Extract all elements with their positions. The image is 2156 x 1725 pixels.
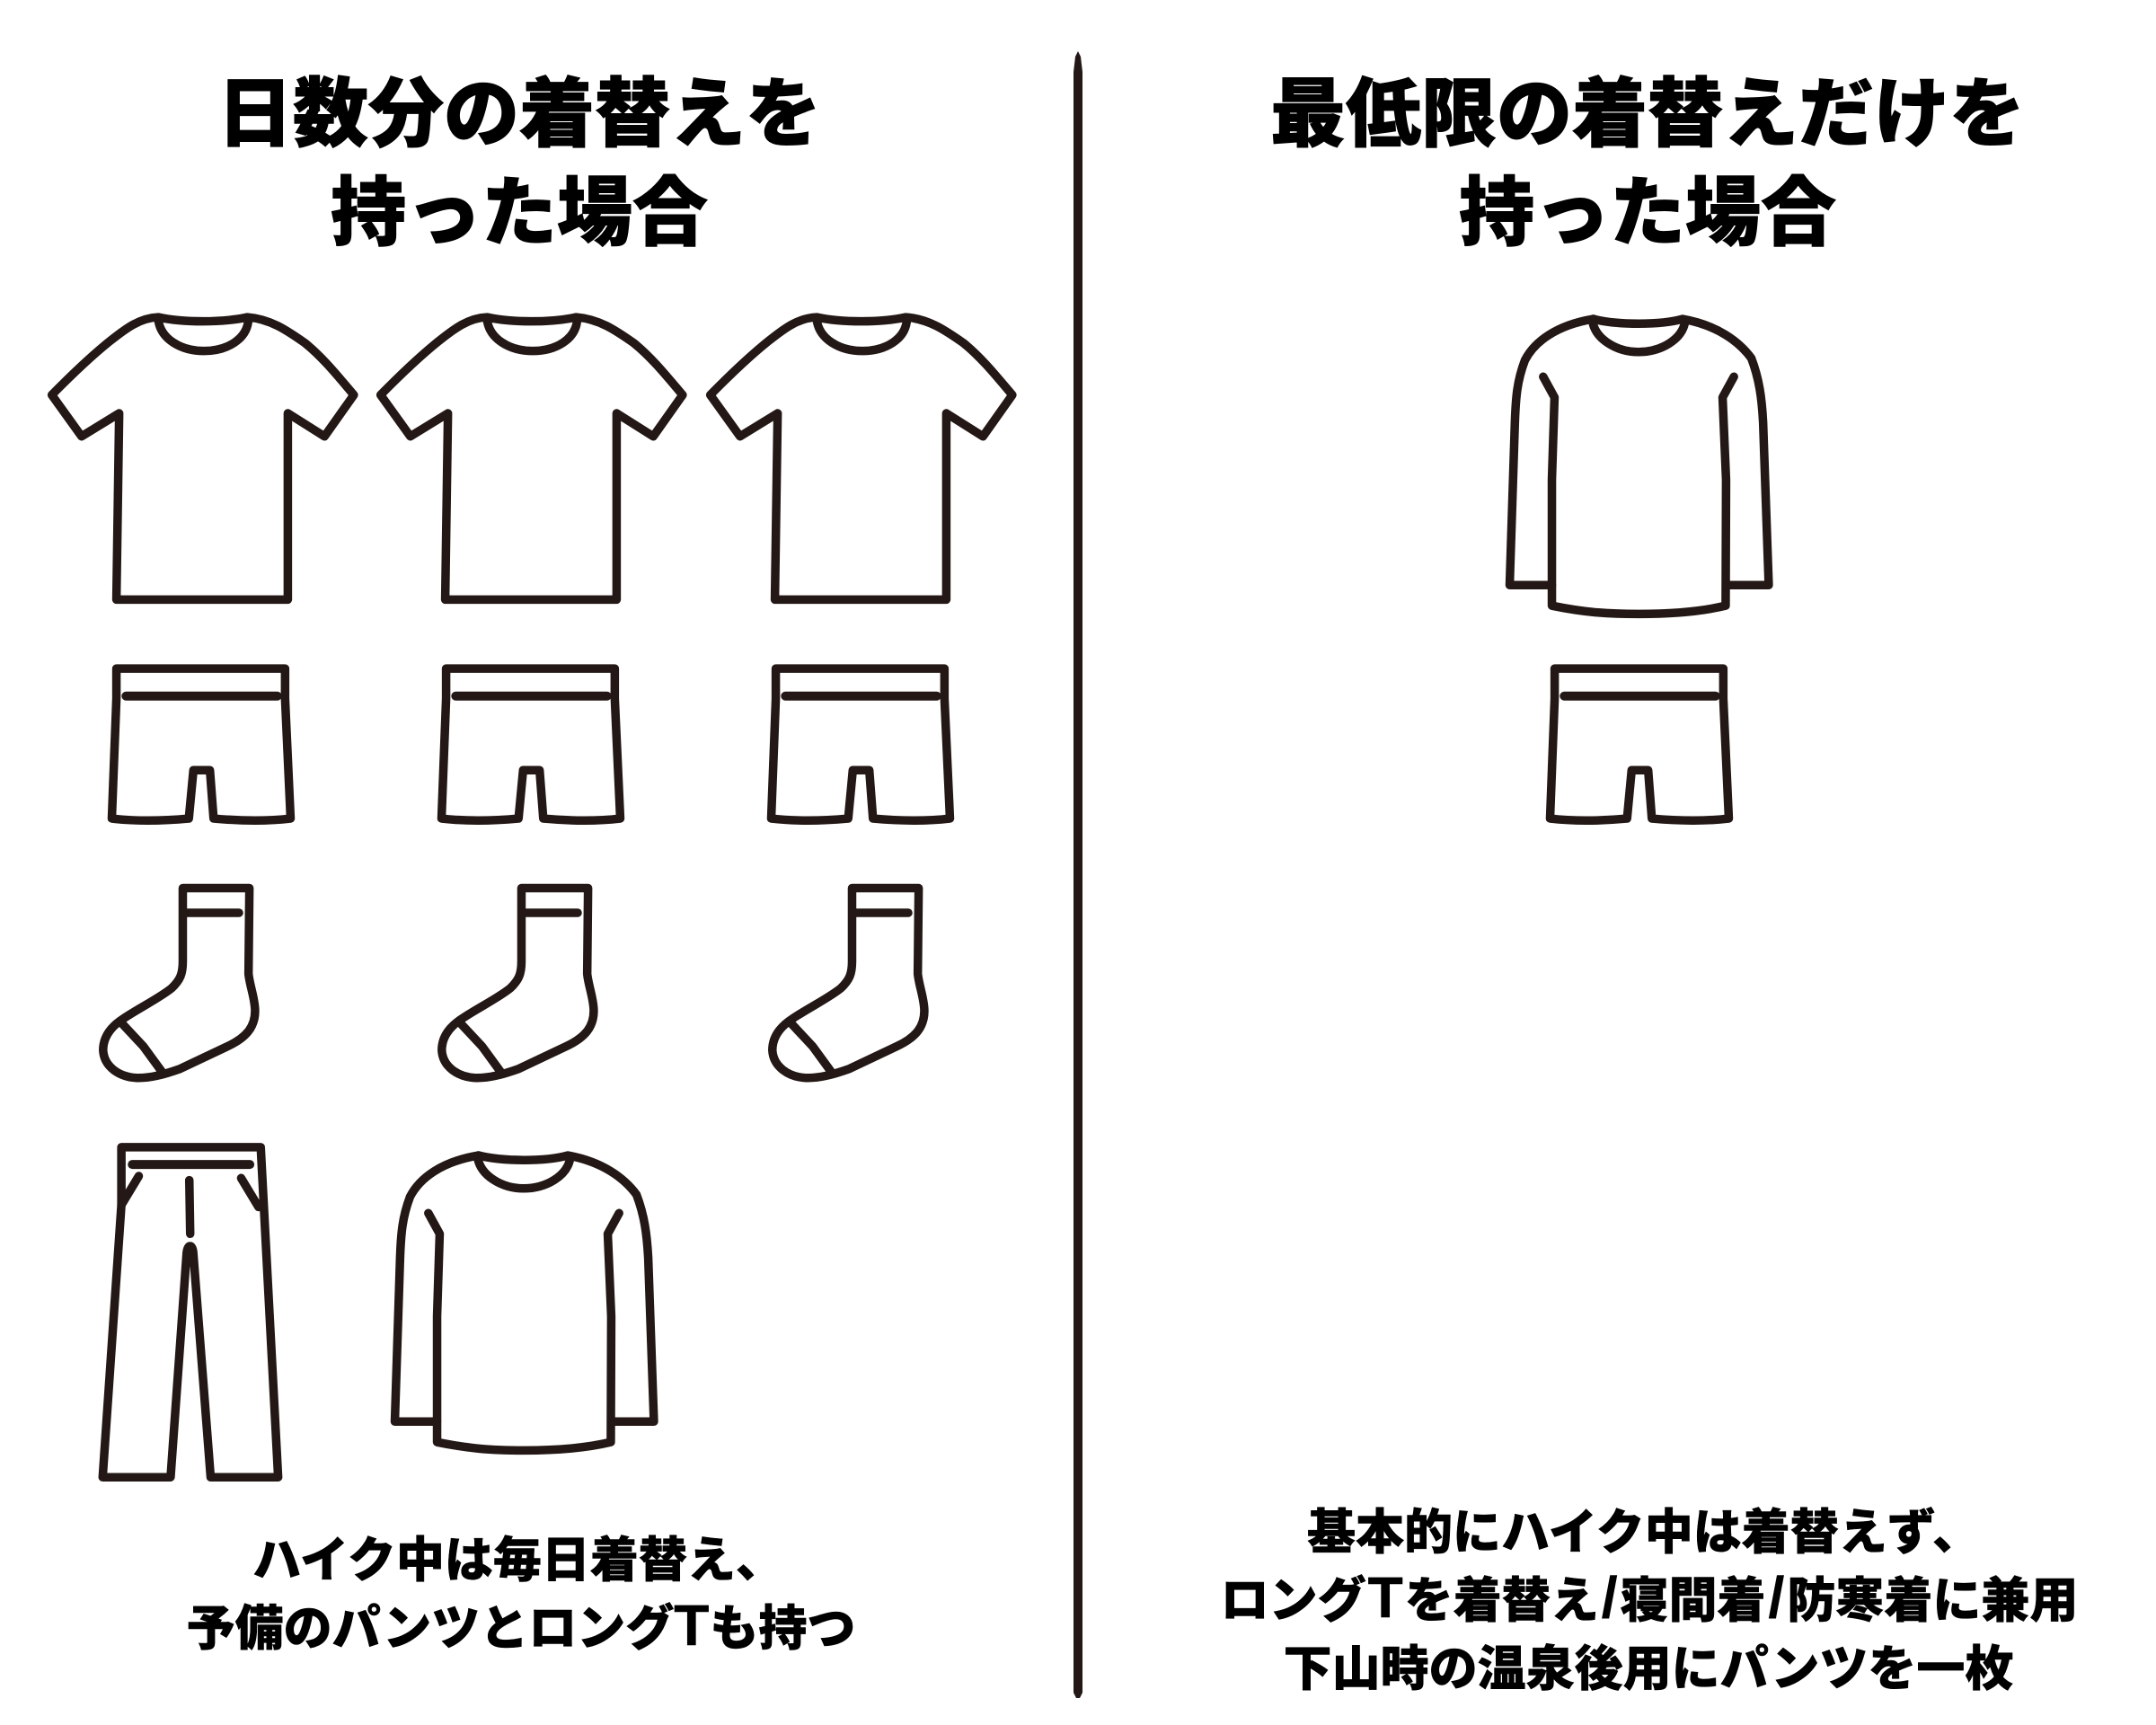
right panel: minimum change of clothes xyxy=(1221,72,2078,1696)
right caption: 下山時の温泉後用にパンツを一枚 xyxy=(1284,1642,2013,1696)
left panel: full change of clothes xyxy=(52,72,1012,1658)
left heading: 日数分の着替えを xyxy=(217,72,821,156)
icon: long trousers xyxy=(102,1147,278,1477)
right heading: 持った場合 xyxy=(1459,171,1836,255)
right caption: 基本的にハイク中は着替えず、 xyxy=(1307,1506,1981,1560)
left caption: ハイク中は毎日着替え、 xyxy=(252,1534,784,1588)
right caption: ロングTを着替え/寝間着/防寒着に兼用 xyxy=(1221,1565,2078,1630)
right heading: 最低限の着替えだけを xyxy=(1270,72,2025,156)
icon: long-sleeve shirt xyxy=(395,1155,654,1450)
left heading: 持った場合 xyxy=(331,171,708,255)
icon: long-sleeve shirt xyxy=(1510,319,1769,614)
icons: three underpants xyxy=(111,668,950,820)
left caption: 予備のパンツとロングTも持つ xyxy=(187,1593,855,1658)
icons: three t-shirts xyxy=(52,317,1012,599)
icon: underpants xyxy=(1550,668,1728,820)
divider line xyxy=(1074,51,1082,1698)
icons: three socks xyxy=(103,888,924,1078)
